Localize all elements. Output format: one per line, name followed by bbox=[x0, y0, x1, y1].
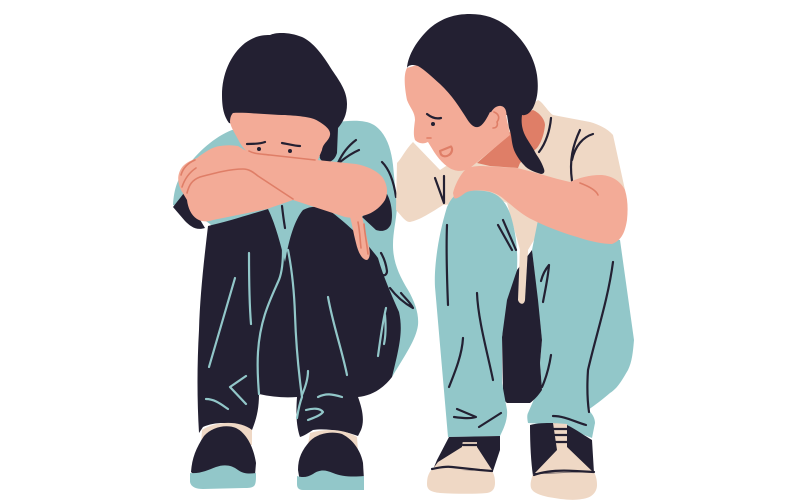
right child right shoe bbox=[530, 423, 597, 500]
right child eyebrow and eye bbox=[427, 114, 441, 138]
right child front leg bbox=[435, 190, 517, 437]
left child right shoe bbox=[297, 433, 364, 490]
right child hair bbox=[407, 14, 538, 127]
right child shirt bbox=[396, 100, 625, 304]
right child arm bbox=[453, 166, 628, 244]
right child neck bbox=[477, 110, 545, 168]
left child sleeves bbox=[173, 193, 392, 231]
left child lower hand bbox=[349, 214, 370, 260]
right child shirt creases bbox=[435, 118, 593, 203]
right child braid bbox=[507, 115, 544, 174]
figure: left child hugging knees bbox=[173, 33, 418, 490]
right child shirt tail bbox=[518, 248, 528, 304]
right child face bbox=[405, 64, 510, 171]
left child left shoe bbox=[190, 426, 256, 489]
left child hair bbox=[222, 33, 347, 162]
right child inner dark pants bbox=[502, 250, 542, 403]
left child eyebrows and eyes bbox=[247, 142, 300, 153]
right child back teal bbox=[527, 220, 634, 438]
left child arm and finger lines bbox=[181, 151, 368, 254]
left child side creases bbox=[282, 140, 413, 308]
right child elbow line bbox=[580, 183, 598, 195]
left child crossed arms bbox=[178, 145, 387, 221]
right child left shoe bbox=[427, 436, 500, 494]
figure: right child comforting bbox=[396, 14, 634, 500]
left child ankle cuffs bbox=[201, 423, 358, 452]
right child pants creases bbox=[447, 220, 613, 427]
right child mouth bbox=[440, 146, 452, 156]
left child shirt and back bbox=[173, 121, 418, 377]
right child ear bbox=[487, 106, 506, 131]
left child pants creases bbox=[206, 250, 386, 420]
left child face bbox=[230, 113, 330, 162]
left child pants bbox=[198, 207, 401, 437]
